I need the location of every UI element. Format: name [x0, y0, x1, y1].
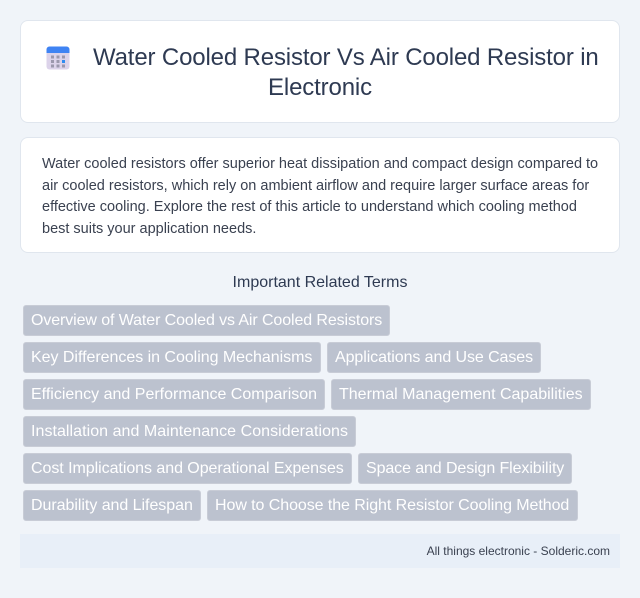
- icon: calendar: [46, 46, 70, 70]
- footer bar: All things electronic - Solderic.com: [427, 544, 610, 558]
- chip: key differences: Key Differences in Cooling Mechanisms: [31, 349, 312, 366]
- chip: cost: [23, 453, 352, 484]
- chip: cost: Cost Implications and Operational Expenses: [31, 460, 344, 477]
- footer bar: [20, 534, 620, 568]
- chip: overview: Overview of Water Cooled vs Air Cooled Resistors: [31, 312, 382, 329]
- chip: durability: Durability and Lifespan: [31, 497, 193, 514]
- chip: space: [358, 453, 572, 484]
- chip: space: Space and Design Flexibility: [366, 460, 564, 477]
- chip: installation: [23, 416, 356, 447]
- related terms chips: [23, 305, 591, 521]
- intro paragraph: Water cooled resistors offer superior heat dissipation and compact design compared to air cooled resistors, which rely on ambient airflow and require larger surface areas for effective cooling. Explore the rest of this article to understand which cooling method best suits your application needs.: [42, 156, 598, 236]
- chip: overview: [23, 305, 390, 336]
- chip: applications: Applications and Use Cases: [335, 349, 533, 366]
- intro text card: [20, 137, 620, 253]
- chip: key differences: [23, 342, 321, 373]
- header card: [20, 20, 620, 123]
- chip: efficiency: Efficiency and Performance Comparison: [31, 386, 317, 403]
- title: Water Cooled Resistor Vs Air Cooled Resistor in: [93, 44, 599, 71]
- related terms heading: Important Related Terms: [233, 274, 407, 291]
- chip: how to choose: How to Choose the Right Resistor Cooling Method: [215, 497, 569, 514]
- title: [93, 44, 599, 101]
- chip: how to choose: [207, 490, 578, 521]
- chip: applications: [327, 342, 541, 373]
- chip: thermal management: [331, 379, 591, 410]
- title: Electronic: [268, 74, 372, 101]
- chip: thermal management: Thermal Management Capabilities: [339, 386, 583, 403]
- chip: durability: [23, 490, 201, 521]
- chip: installation: Installation and Maintenance Considerations: [31, 423, 348, 440]
- chip: efficiency: [23, 379, 325, 410]
